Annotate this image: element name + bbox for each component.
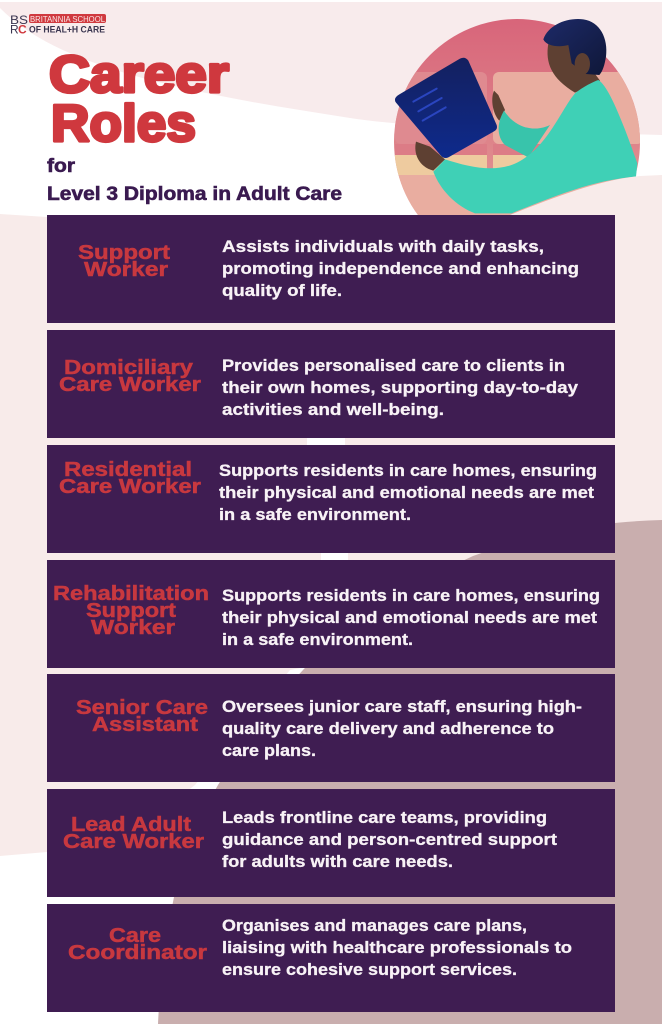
- role description: promoting independence and enhancing: [222, 260, 579, 278]
- role description: [222, 917, 572, 979]
- illustration: person reading a tablet: [394, 19, 640, 215]
- subtitle: for: [47, 156, 76, 177]
- role description: [222, 809, 558, 871]
- role description: in a safe environment.: [219, 506, 411, 524]
- role name: Rehabilitation: [53, 583, 209, 605]
- role name: Coordinator: [68, 942, 207, 964]
- hand holding tablet bottom: [415, 142, 445, 171]
- role name: Senior Care: [76, 697, 208, 719]
- role description: Assists individuals with daily tasks,: [222, 238, 544, 256]
- role description: Oversees junior care staff, ensuring high-: [222, 698, 582, 716]
- role description: quality care delivery and adherence to: [222, 720, 554, 738]
- role name: [53, 583, 209, 639]
- panel: residential care worker: [47, 445, 615, 553]
- role name: [63, 814, 204, 853]
- role description: quality of life.: [222, 282, 342, 300]
- role description: liaising with healthcare professionals to: [222, 939, 572, 957]
- logo monogram: BS: [10, 13, 28, 27]
- role name: Domiciliary: [64, 357, 194, 379]
- tablet: [395, 58, 497, 158]
- role description: Supports residents in care homes, ensuring: [219, 462, 597, 480]
- role name: Worker: [91, 617, 175, 639]
- subtitle: [47, 156, 342, 205]
- role name: Support: [78, 242, 170, 264]
- logo: Britannia School of Health Care: OF HEAL+H CARE: [29, 24, 105, 34]
- role name: [68, 925, 207, 964]
- teal shirt: [433, 80, 637, 213]
- role name: [59, 357, 201, 396]
- role description: in a safe environment.: [222, 631, 413, 649]
- role description: ensure cohesive support services.: [222, 961, 517, 979]
- role description: Provides personalised care to clients in: [222, 357, 565, 375]
- hand holding tablet top: [492, 91, 505, 121]
- role description: guidance and person-centred support: [222, 831, 558, 849]
- panel: senior care assistant: [47, 674, 615, 782]
- head and neck: [548, 43, 600, 93]
- panel: care coordinator: [47, 904, 615, 1012]
- logo monogram: R: [10, 22, 19, 36]
- role description: [222, 587, 600, 649]
- role name: Residential: [64, 459, 192, 481]
- title: Career Roles: Career: [49, 46, 229, 104]
- role description: their physical and emotional needs are met: [219, 484, 595, 502]
- circle backdrop with window: [394, 19, 640, 215]
- role name: [78, 242, 170, 281]
- role description: Organises and manages care plans,: [222, 917, 527, 935]
- title: Career Roles: [49, 46, 229, 153]
- role name: Assistant: [92, 714, 198, 736]
- role name: Care: [109, 925, 161, 947]
- hair: [543, 19, 606, 75]
- background shape: top pink curve: [0, 2, 662, 135]
- role name: Care Worker: [59, 374, 201, 396]
- role name: Care Worker: [59, 476, 201, 498]
- role name: Care Worker: [63, 831, 204, 853]
- logo monogram: C: [18, 22, 27, 36]
- role description: [222, 238, 579, 300]
- role description: [222, 357, 579, 419]
- logo wordmark: BRITANNIA SCHOOL: [30, 14, 105, 24]
- role description: [219, 462, 597, 524]
- role description: care plans.: [222, 742, 316, 760]
- logo monogram: [10, 13, 28, 36]
- role description: Supports residents in care homes, ensuring: [222, 587, 600, 605]
- far sleeve: [499, 111, 550, 157]
- background shape: taupe curve: [158, 520, 662, 1024]
- panel: rehabilitation support worker: [47, 560, 615, 668]
- role description: their physical and emotional needs are met: [222, 609, 598, 627]
- role name: Worker: [84, 259, 168, 281]
- role name: Lead Adult: [71, 814, 191, 836]
- role name: [76, 697, 208, 736]
- role name: [59, 459, 201, 498]
- role name: Support: [86, 600, 176, 622]
- role description: their own homes, supporting day-to-day: [222, 379, 579, 397]
- panel: lead adult care worker: [47, 789, 615, 897]
- panel: domiciliary care worker: [47, 330, 615, 438]
- title: Career Roles: Roles: [51, 95, 196, 153]
- role description: for adults with care needs.: [222, 853, 453, 871]
- subtitle: Level 3 Diploma in Adult Care: [47, 184, 342, 205]
- role description: [222, 698, 582, 760]
- panel: support worker: [47, 215, 615, 323]
- background shape: lower pink panel: [0, 175, 662, 856]
- role description: activities and well-being.: [222, 401, 444, 419]
- ear: [575, 53, 590, 75]
- role description: Leads frontline care teams, providing: [222, 809, 547, 827]
- logo: Britannia School of Health Care: [10, 13, 106, 36]
